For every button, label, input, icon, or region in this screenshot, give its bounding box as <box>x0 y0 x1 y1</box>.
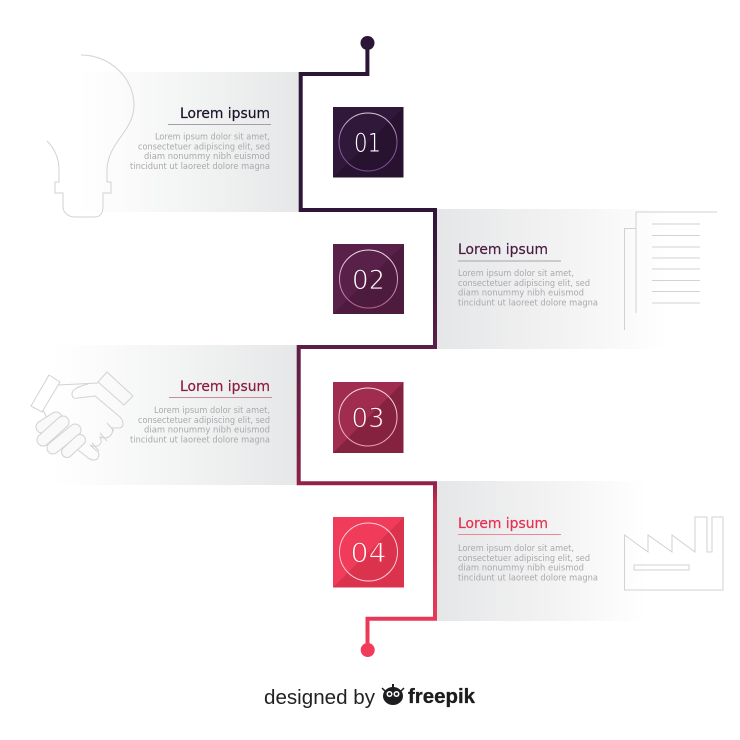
number tile 01 <box>333 107 404 178</box>
number tile 02: 02 <box>352 265 385 296</box>
number tile 02 <box>333 244 404 314</box>
step 3 text <box>130 379 272 446</box>
body text 3: diam nonummy nibh euismod <box>144 426 270 436</box>
body text 1 <box>130 132 270 172</box>
icon: freepik logo <box>382 684 404 705</box>
step 2 text <box>458 242 598 308</box>
icon: handshake <box>31 372 133 460</box>
heading 3: Lorem ipsum <box>180 379 270 395</box>
number tile 04 <box>333 517 404 588</box>
body text 4: Lorem ipsum dolor sit amet, <box>458 544 574 554</box>
body text 3: Lorem ipsum dolor sit amet, <box>154 406 270 416</box>
body text 4 <box>458 544 598 584</box>
body text 4: diam nonummy nibh euismod <box>458 564 584 574</box>
panel: step 2 background <box>436 209 668 349</box>
freepik wordmark: freepik <box>408 686 476 708</box>
body text 4: consectetuer adipiscing elit, sed <box>458 554 590 564</box>
body text 3: consectetuer adipiscing elit, sed <box>138 416 270 426</box>
timeline path <box>299 43 435 650</box>
body text 2: Lorem ipsum dolor sit amet, <box>458 269 574 279</box>
icon: light bulb <box>47 55 134 217</box>
body text 2 <box>458 269 598 308</box>
step 1 text <box>130 106 271 172</box>
body text 4: tincidunt ut laoreet dolore magna <box>458 574 598 584</box>
body text 2: diam nonummy nibh euismod <box>458 288 584 298</box>
body text 2: tincidunt ut laoreet dolore magna <box>458 298 598 308</box>
divider 2 <box>458 260 561 262</box>
body text 3 <box>130 406 270 446</box>
number tile 03 <box>333 382 404 453</box>
step 4 text <box>458 516 598 584</box>
credit <box>264 684 476 709</box>
icon: factory <box>624 517 723 590</box>
fingers <box>42 418 80 452</box>
body text 1: diam nonummy nibh euismod <box>144 152 270 162</box>
body text 1: Lorem ipsum dolor sit amet, <box>155 132 270 142</box>
body text 1: tincidunt ut laoreet dolore magna <box>130 162 270 172</box>
heading 1: Lorem ipsum <box>180 106 270 122</box>
end dot <box>361 643 375 657</box>
divider 3 <box>169 397 272 398</box>
panel: step 3 background <box>50 345 298 485</box>
icon: document pages <box>624 212 717 330</box>
panel: step 1 background <box>78 72 299 212</box>
number tile 01: 01 <box>354 128 381 159</box>
body text 1: consectetuer adipiscing elit, sed <box>138 142 270 152</box>
heading 2: Lorem ipsum <box>458 242 548 258</box>
body text 2: consectetuer adipiscing elit, sed <box>458 279 590 289</box>
credit text: designed by <box>264 687 375 709</box>
divider 1 <box>168 124 271 125</box>
start dot <box>360 36 374 50</box>
heading 4: Lorem ipsum <box>458 516 548 532</box>
number tile 04: 04 <box>350 538 386 569</box>
number tile 03: 03 <box>352 403 384 434</box>
divider 4 <box>458 534 561 535</box>
body text 3: tincidunt ut laoreet dolore magna <box>130 436 270 446</box>
panel: step 4 background <box>436 481 646 621</box>
